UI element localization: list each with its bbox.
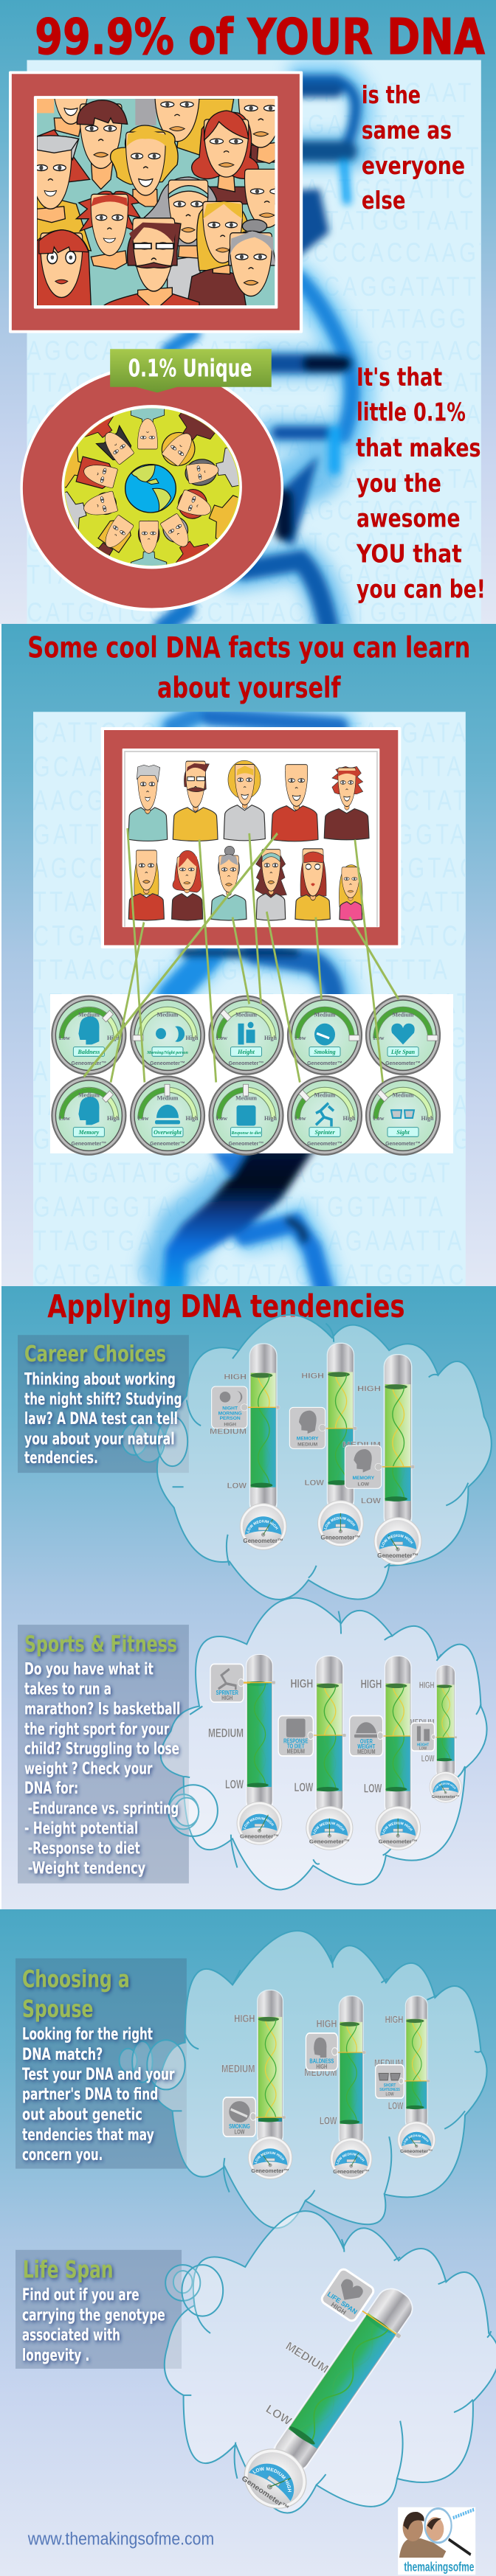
gauge: Height: High (264, 1035, 277, 1041)
gauge: Life Span: Life Span (390, 1049, 415, 1055)
DNA photo background: GCATTAGCCTAAGGCTTACGATTAG (33, 1124, 473, 1156)
DNA photo background: TCGATTAGCATGGCTAATCGATTAG (33, 1022, 469, 1054)
illustration: blonde woman (128, 850, 164, 920)
gauge: Baldness: Geneometer™ (72, 1060, 106, 1066)
gauge: Sight: Sight (396, 1129, 410, 1136)
thermometer: memory low: Geneometer™ (377, 1552, 418, 1559)
gauge: Sprinter: Low (294, 1115, 306, 1122)
thermometer: height (430, 1665, 462, 1803)
thermometer: overweight (375, 1656, 421, 1850)
gauge: Response to diet: Response to diet (231, 1131, 261, 1136)
gauge: Response to diet: Medium (235, 1094, 257, 1102)
text: it's that little: awesome (356, 505, 461, 533)
text: choosing a spouse: partner's DNA to find (22, 2084, 158, 2103)
badge: sprinter: SPRINTER (216, 1690, 238, 1696)
DNA photo background: TTAGGCATACCTATCGATGAGCAATA (27, 560, 479, 590)
badge: height: HEIGHT (417, 1743, 429, 1748)
badge: sprinter: HIGH (221, 1696, 232, 1701)
gauge: Overweight: Overweight (154, 1129, 182, 1136)
text: choosing a spouse: DNA match? (22, 2044, 103, 2064)
gauge: Memory: High (107, 1115, 120, 1122)
scale labels: spouse thermometers: LOW (388, 2100, 404, 2112)
badge: response to diet: TO DIET (287, 1744, 305, 1750)
gauge: Response to diet: Geneometer™ (229, 1140, 264, 1147)
gauge: Sight: Medium (393, 1091, 414, 1098)
text: sports and fitness: -Response to diet (28, 1838, 140, 1858)
scale labels: spouse thermometers: HIGH (385, 2014, 403, 2025)
DNA photo background (33, 712, 466, 1286)
badge: smoking (223, 2097, 256, 2136)
badge: memory low: LOW (358, 1482, 370, 1487)
gauge: Smoking: Smoking (314, 1049, 336, 1055)
thermometer: smoking: Geneometer™ (251, 2167, 289, 2174)
badge: memory low (345, 1445, 382, 1488)
gauge: Smoking: Geneometer™ (307, 1060, 342, 1066)
gauge: Memory: Memory (78, 1129, 99, 1136)
gauge: Smoking (288, 996, 362, 1075)
logo: the makings of me: themakingsofme (404, 2561, 474, 2575)
text: life span: longevity . (22, 2345, 89, 2365)
scale labels: spouse thermometers: HIGH (317, 2017, 337, 2030)
gauge: Sprinter: Geneometer™ (307, 1140, 342, 1147)
gauge: Height: Medium (235, 1011, 257, 1018)
scale labels: sports thermometers: HIGH (419, 1681, 435, 1690)
thermometer: sprinter (236, 1654, 282, 1845)
text: life span: carrying the genotype (22, 2305, 165, 2325)
thermometer: response to diet: Geneometer™ (309, 1839, 350, 1844)
box: life span (16, 2250, 182, 2369)
scale labels: career thermometers: HIGH (224, 1373, 247, 1382)
scale labels: career thermometers: HIGH (357, 1385, 381, 1394)
gauge: Height: Height (237, 1049, 255, 1055)
badge: short sightedness (376, 2065, 404, 2098)
text: sports and fitness: -Weight tendency (28, 1858, 145, 1878)
thermometer: sprinter: Geneometer™ (240, 1833, 279, 1839)
gauge: Height (210, 996, 283, 1075)
text: choosing a spouse: Test your DNA and your (22, 2065, 175, 2084)
heading: Some cool DNA facts you can learn (27, 632, 470, 665)
badge: night morning person: HIGH (224, 1422, 236, 1427)
gauge: Memory: Medium (78, 1091, 100, 1098)
gauge: Smoking: Medium (314, 1011, 336, 1018)
connector lines: people to gauges (84, 828, 399, 1083)
DNA photo background: TTAGATATGCATTGGAGAACCGAT (33, 1158, 453, 1190)
scale labels: spouse thermometers (221, 2012, 404, 2127)
thermometer: life span tilted: Geneometer™ (240, 2475, 290, 2513)
text: it's that little: you can be! (356, 575, 486, 604)
DNA photo background: TCAGTTACCGATGCCCCCCACCAAGT (27, 238, 495, 268)
text: life span: Life Span (23, 2256, 113, 2283)
label: medium tilted: MEDIUM (283, 2340, 331, 2376)
text: life span: associated with (22, 2325, 120, 2344)
text: career choices: tendencies. (24, 1448, 98, 1468)
gauge: Sprinter (288, 1077, 362, 1155)
panel: gauge grid (50, 994, 453, 1155)
illustration: red spiky man (324, 766, 369, 840)
scale labels: spouse thermometers: MEDIUM (304, 2066, 337, 2078)
thermometer: height: Geneometer™ (432, 1795, 460, 1799)
badge: night morning person: NIGHT (222, 1406, 238, 1412)
thermometer: night morning person: LOW MEDIUM HIGH (247, 1519, 278, 1532)
gauge: Sprinter: Medium (314, 1091, 336, 1098)
badge: night morning person: MORNING (218, 1411, 242, 1416)
thermometer: memory low: LOW MEDIUM HIGH (381, 1534, 413, 1547)
cloud: career (122, 1315, 492, 1600)
gauge: Morning/Night: Geneometer™ (150, 1060, 185, 1066)
DNA photo background: TACCATGGCTTAGGATGCATTACCTA (27, 464, 480, 494)
text: choosing a spouse: out about genetic (22, 2105, 142, 2124)
gauge: Height: Geneometer™ (229, 1060, 264, 1066)
badge: smoking: LOW (234, 2129, 245, 2136)
text: sports and fitness: - Height potential (24, 1818, 138, 1838)
scale labels: sports thermometers: HIGH (361, 1677, 382, 1691)
DNA photo background: TACGGATCCATTAAGCTAGGACTTA (33, 1090, 471, 1122)
DNA photo background: ATCGGATTACCCATTGACCGGTAATT (27, 142, 482, 173)
panel: family picture frame (101, 727, 401, 948)
thermometer: night morning person (239, 1343, 286, 1550)
heading: about yourself (157, 672, 341, 705)
DNA photo background: GATCCATGCAATTGACATATGGTAAT (27, 206, 476, 237)
illustration: red haired woman with glasses (295, 849, 330, 920)
text: it's that little: little 0.1% (356, 398, 466, 427)
thermometer: overweight: LOW MEDIUM HIGH (382, 1822, 413, 1834)
badge: short sightedness: LOW (386, 2092, 394, 2097)
text: sports and fitness: Sports & Fitness (24, 1632, 177, 1657)
scale labels: spouse thermometers: MEDIUM (221, 2063, 255, 2075)
badge: sprinter (210, 1664, 250, 1702)
DNA photo background: GATTACGATCATTGACATGATGGTA (33, 819, 468, 850)
DNA helix (161, 712, 343, 1298)
scale labels: career thermometers: HIGH (301, 1372, 324, 1381)
badge: response to diet (278, 1716, 314, 1756)
DNA photo background: CATGATCGGCCTATACATATGGTAC (33, 1259, 467, 1291)
text: is the same: else (362, 187, 405, 215)
illustration: woman with headband (255, 850, 286, 920)
thermometer: short sightedness: Geneometer™ (400, 2149, 433, 2154)
text: choosing a spouse: Looking for the right (22, 2024, 153, 2044)
text: sports and fitness: takes to run a (24, 1678, 111, 1698)
gauge: Life Span: Medium (393, 1011, 414, 1018)
cloud: sports (161, 1598, 487, 1889)
DNA photo background: TTAGTGATTACGCATTGAGAAATTA (33, 1226, 465, 1257)
DNA photo background: AGCTTAGGCATTACTACCAGGATATT (27, 272, 479, 302)
gauge: Response to diet: High (264, 1115, 277, 1122)
thermometer: smoking: LOW MEDIUM HIGH (254, 2151, 285, 2164)
thermometer: baldness: LOW MEDIUM HIGH (336, 2153, 365, 2164)
gauge: Sight: High (421, 1115, 434, 1122)
gauge: Overweight (131, 1077, 204, 1155)
badge: short sightedness: SIGHTEDNESS (379, 2088, 400, 2091)
text: sports and fitness: -Endurance vs. sprinting (28, 1798, 179, 1818)
illustration: grandmother with bun (211, 846, 247, 920)
scale labels: spouse thermometers: MEDIUM (374, 2058, 403, 2069)
panel: crowd picture frame (9, 63, 303, 333)
panel: spouse and life span (0, 1909, 496, 2576)
gauge: Overweight: Low (137, 1115, 149, 1122)
gauge: Memory: Geneometer™ (72, 1140, 106, 1147)
illustration: moustache man (173, 761, 218, 841)
badge: memory medium: MEMORY (297, 1437, 319, 1442)
gauge: Height: Low (216, 1035, 227, 1041)
badge: overweight (350, 1716, 383, 1756)
thermometer: response to diet: LOW MEDIUM HIGH (312, 1822, 345, 1834)
text: sports and fitness: Do you have what it (24, 1659, 154, 1678)
gauge: Baldness: Baldness (78, 1049, 100, 1055)
ring: world faces (21, 367, 282, 610)
banner: 0.1% Unique: 0.1% Unique (128, 355, 252, 382)
scale labels: career thermometers: LOW (305, 1479, 324, 1487)
illustration: red bob woman (172, 850, 203, 920)
gauge: Sight (366, 1077, 440, 1155)
heading: Applying DNA tendencies (47, 1288, 405, 1325)
gauge: Overweight: Medium (157, 1094, 179, 1102)
badge: response to diet: MEDIUM (287, 1749, 305, 1755)
scale labels: sports thermometers: LOW (421, 1754, 435, 1764)
panel: applying DNA tendencies (1, 1286, 496, 1909)
box: sports and fitness (18, 1625, 189, 1884)
badge: life span tilted: LIFE SPAN (326, 2291, 359, 2316)
thermometer: short sightedness: LOW MEDIUM HIGH (403, 2134, 429, 2145)
text: career choices: the night shift? Studying (24, 1389, 182, 1409)
gauge: Sight: Low (373, 1115, 385, 1122)
thermometer: memory medium: Geneometer™ (321, 1534, 360, 1541)
scale labels: sports thermometers: LOW (294, 1781, 314, 1795)
badge: baldness: HIGH (316, 2063, 327, 2070)
text: is the same: same as (362, 117, 452, 145)
text: it's that little (356, 364, 486, 604)
DNA photo background: GCAATTCGATTAGCTTGCCATATTA (33, 751, 464, 783)
thermometer: life span tilted (240, 2288, 413, 2513)
banner: 0.1% Unique (110, 349, 272, 392)
badge: overweight: MEDIUM (357, 1750, 376, 1755)
thermometer: baldness: Geneometer™ (333, 2169, 369, 2175)
text: life span (22, 2256, 165, 2365)
text: career choices (24, 1341, 182, 1468)
badge: night morning person: PERSON (220, 1416, 241, 1421)
badge: life span tilted (320, 2268, 375, 2322)
gauge: Sight: Geneometer™ (385, 1140, 421, 1147)
DNA photo background: AGCCATGCTCATTGCCATATGGTAAC (27, 336, 484, 367)
DNA photo background: ATGCATTGACGATTAGCATCGGCAT (33, 988, 473, 1020)
illustration: crowd of faces (37, 99, 275, 305)
text: life span: Find out if you are (22, 2285, 140, 2305)
DNA photo background: ACTGGATCATTGCCTGATTACCAGTA (27, 400, 483, 431)
text: sports and fitness: the right sport for your (24, 1718, 169, 1738)
text: career choices: law? A DNA test can tell (24, 1409, 178, 1428)
badge: memory medium (289, 1407, 326, 1448)
text: career choices: you about your natural (24, 1428, 175, 1448)
gauge: Life Span (366, 996, 440, 1075)
badge: baldness (306, 2033, 337, 2070)
text: choosing a spouse: concern you. (22, 2145, 103, 2164)
cloud 1 thermometers and badges (210, 1342, 422, 1565)
panel: 99.9 percent (0, 0, 496, 628)
scale labels: career thermometers (210, 1372, 381, 1505)
DNA photo background: TTAACCATTAGGCATTTATTATTTA (33, 954, 450, 986)
illustration: bald man (272, 765, 318, 841)
scale labels: sports thermometers: LOW (364, 1782, 382, 1796)
text: it's that little: YOU that (356, 541, 462, 569)
gauge: Morning/Night (131, 996, 204, 1075)
badge: night morning person (212, 1386, 248, 1428)
DNA photo background: GATTCAGGCTAATCTATTGCATTAGA (27, 432, 477, 462)
gauge: Life Span: Low (373, 1035, 385, 1041)
text: choosing a spouse: Spouse (22, 1995, 93, 2023)
thermometer: baldness (330, 1996, 372, 2180)
text: career choices: Thinking about working (24, 1369, 176, 1389)
thermometer: memory medium (317, 1342, 364, 1546)
text: choosing a spouse: tendencies that may (22, 2125, 154, 2145)
scale labels: career thermometers: LOW (361, 1496, 381, 1505)
DNA photo background (27, 60, 495, 628)
badge: memory medium: MEDIUM (297, 1443, 318, 1448)
website url: www.themakingsofme.com (27, 2529, 214, 2549)
scale labels: spouse thermometers: HIGH (234, 2012, 255, 2024)
gauge: Smoking: Low (294, 1035, 306, 1041)
text: sports and fitness (24, 1632, 180, 1878)
heading (27, 632, 470, 705)
illustration: blonde girl (339, 865, 362, 920)
text: is the same: is the (362, 81, 421, 109)
scale labels: sports thermometers: LOW (225, 1777, 244, 1791)
DNA photo background: CATTGGCCATTAGGCATTTAGGATA (33, 718, 469, 749)
DNA photo background: CAGTTAGCATGGCTAATCGATTAGCA (27, 528, 484, 558)
illustration: faces around the globe (65, 409, 239, 566)
gauge: Baldness: High (107, 1035, 120, 1041)
illustration: grey haired man (128, 765, 168, 841)
cloud: spouse (120, 1931, 487, 2228)
logo: the makings of me (398, 2507, 475, 2575)
badge: smoking: SMOKING (229, 2123, 250, 2130)
thermometer: response to diet (306, 1656, 353, 1850)
DNA photo background: CATGATCGGCCTATACATATGGTACA (27, 598, 478, 628)
title: 99.9% of YOUR DNA (35, 9, 485, 66)
gauge: Response to diet (210, 1077, 283, 1155)
scale labels: career thermometers: MEDIUM (342, 1441, 381, 1450)
badge: height (411, 1723, 435, 1752)
DNA photo background: TTAGATTACCGTAACCCAGGAACGAT (27, 368, 486, 398)
thermometer: night morning person: Geneometer™ (243, 1538, 283, 1544)
DNA photo background: CCATGGATTAGCAATATATTTATAGG (27, 304, 469, 334)
badge: short sightedness: SHORT (384, 2083, 396, 2089)
badge: response to diet: RESPONSE (283, 1739, 309, 1745)
DNA photo background: ACTAGGATATCCATTAAGCTAGGACT (27, 496, 480, 527)
DNA photo background: TTAAGCTACCATTGGATCAACCATT (33, 886, 467, 918)
text: career choices: Career Choices (24, 1341, 166, 1367)
panel: cool DNA facts (1, 624, 496, 1286)
thermometer: memory low (373, 1354, 422, 1565)
text: sports and fitness: DNA for: (24, 1778, 78, 1798)
DNA photo background: GATTACATTAGCATTGCTTTAGGAAT (27, 78, 475, 108)
gauge: Sprinter: High (343, 1115, 356, 1122)
DNA photo background: TAGGCATGATTAACGTAATGGTATTC (27, 174, 476, 204)
text: sports and fitness: child? Struggling to lose (24, 1738, 179, 1758)
thermometer: height: LOW MEDIUM HIGH (434, 1782, 456, 1791)
gauge: Baldness: Low (59, 1035, 70, 1041)
thermometer: sprinter: LOW MEDIUM HIGH (243, 1817, 275, 1829)
gauge: Life Span: Geneometer™ (385, 1060, 421, 1066)
text: it's that little: that makes (356, 434, 480, 463)
text: is the same: everyone (362, 152, 465, 180)
label: low tilted: LOW (264, 2403, 294, 2429)
illustration: curly blonde man (224, 760, 265, 841)
thermometer: smoking (248, 1990, 292, 2179)
gauge: Overweight: Geneometer™ (150, 1140, 185, 1147)
gauge: Baldness (52, 996, 125, 1075)
thermometer: life span tilted: LOW MEDIUM HIGH (252, 2467, 292, 2492)
badge: overweight: OVER (360, 1740, 373, 1745)
scale labels: sports thermometers (208, 1677, 435, 1796)
scale labels: sports thermometers: MEDIUM (208, 1726, 244, 1740)
text: it's that little: It's that (356, 364, 442, 392)
gauge: Morning/Night: Morning/Night person (146, 1050, 188, 1055)
text: choosing a spouse: Choosing a (22, 1965, 130, 1993)
scale labels: sports thermometers: MEDIUM (410, 1718, 434, 1728)
gauge: Memory: Low (59, 1115, 70, 1122)
icon: globe (125, 465, 176, 513)
text: is the same (362, 81, 465, 215)
gauge: Overweight: High (186, 1115, 199, 1122)
text: it's that little: you the (356, 470, 441, 499)
text: sports and fitness: weight ? Check your (24, 1758, 153, 1778)
box: career choices (18, 1335, 189, 1473)
box: choosing a spouse (16, 1958, 187, 2169)
text: sports and fitness: marathon? Is basketball (24, 1698, 180, 1718)
badge: life span tilted: HIGH (330, 2301, 348, 2316)
badge: overweight: WEIGHT (357, 1744, 376, 1750)
cloud: life span (165, 2211, 496, 2513)
gauge: Sprinter: Sprinter (314, 1129, 335, 1136)
DNA photo background: AGGCATACCTATCGATGAGCAATAC (33, 1056, 472, 1088)
gauge: Memory (52, 1077, 125, 1155)
gauge: Response to diet: Low (216, 1115, 227, 1122)
badge: height: LOW (419, 1746, 427, 1752)
scale labels: spouse thermometers: LOW (320, 2114, 337, 2127)
gauge: Baldness: Medium (78, 1011, 100, 1018)
gauge: Morning/Night: High (186, 1035, 199, 1041)
scale labels: sports thermometers: HIGH (290, 1677, 313, 1691)
text: choosing a spouse (22, 1965, 175, 2164)
DNA helix (162, 74, 362, 628)
thermometer: memory medium: LOW MEDIUM HIGH (324, 1516, 356, 1530)
thermometer: short sightedness (397, 1996, 435, 2158)
gauge: Morning/Night: Medium (157, 1011, 179, 1018)
thermometer: overweight: Geneometer™ (379, 1839, 418, 1845)
DNA photo background: AACGATTACCAGTTAGGCTACCTAT (33, 785, 469, 816)
DNA photo background: AGCCTTACGGATTCAGTTAGGGTAG (33, 853, 480, 884)
badge: baldness: BALDNESS (309, 2058, 334, 2065)
scale labels: career thermometers: LOW (227, 1482, 247, 1490)
badge: memory low: MEMORY (352, 1476, 375, 1481)
DNA photo background: CTAGGATCGATCATTGGATATATTAT (27, 110, 468, 140)
DNA photo background: CTGACGATTACGGATTAGCGGATCA (33, 920, 478, 952)
DNA photo background: GAATGGTACCATGATATGGTATTA (33, 1192, 446, 1223)
scale labels: career thermometers: MEDIUM (210, 1427, 247, 1436)
